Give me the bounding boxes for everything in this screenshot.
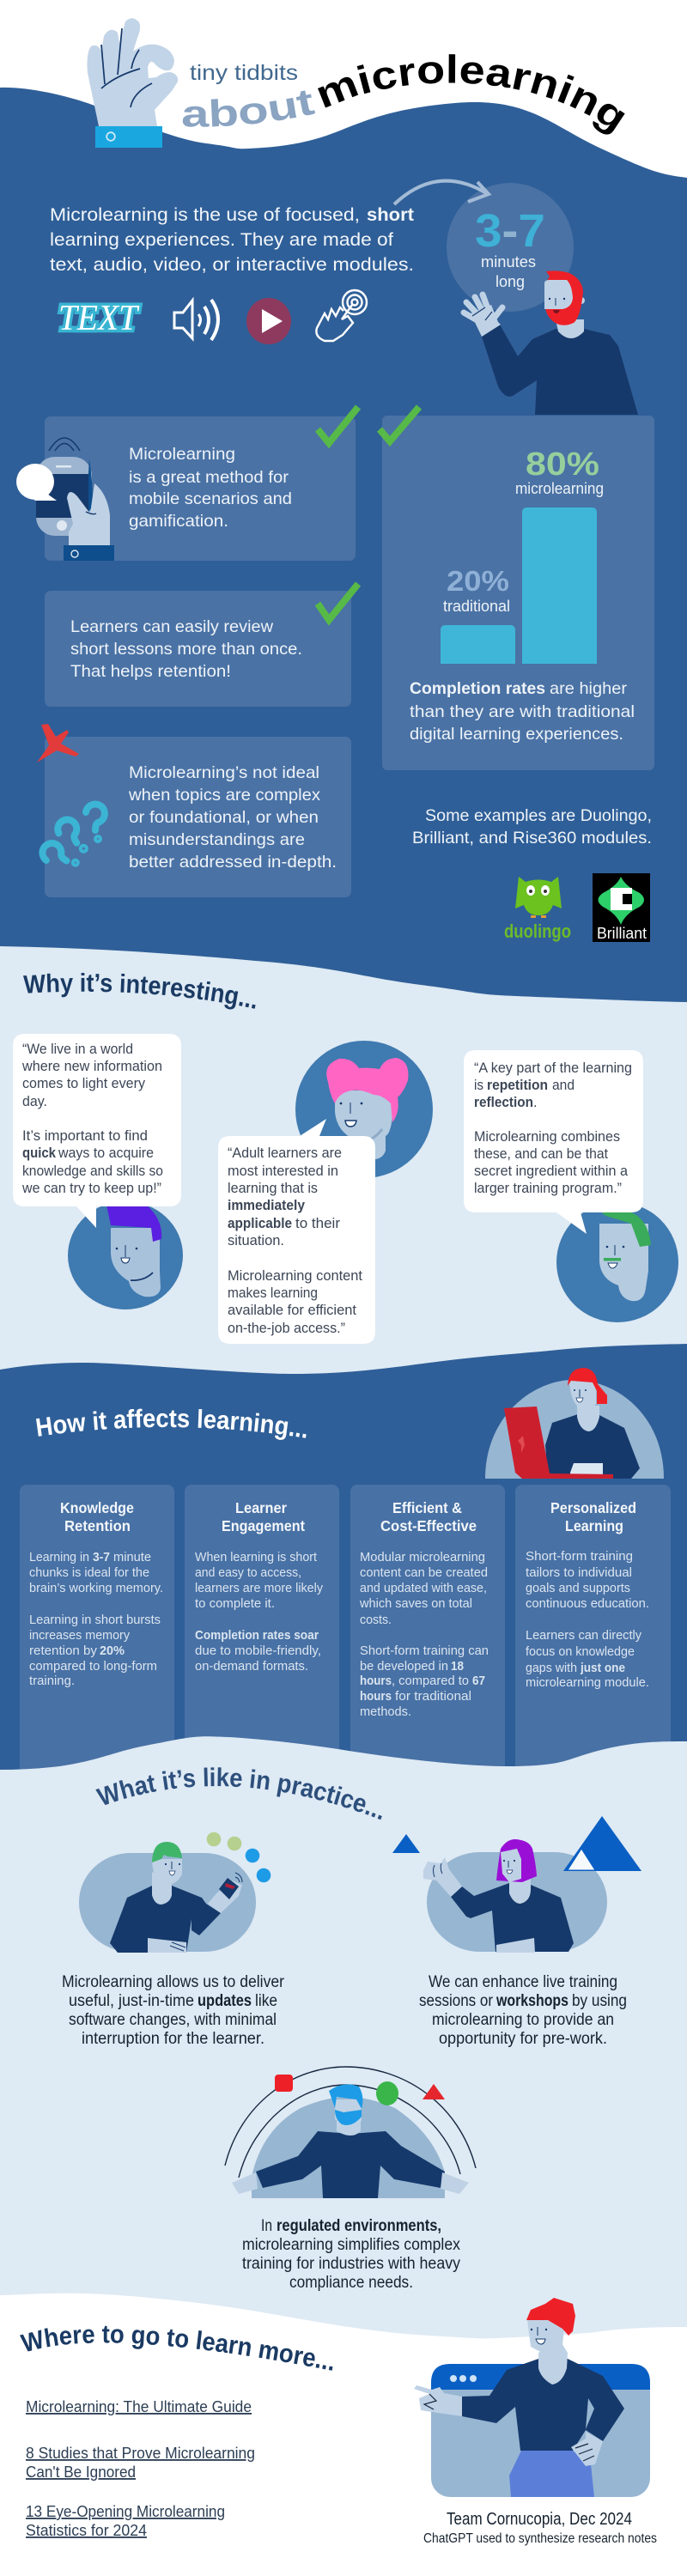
card 3: efficient and cost-effective: 67 [472,1674,485,1688]
credits: Team Cornucopia, Dec 2024 [447,2510,632,2529]
panel: benefit cards [20,1485,671,1811]
bar chart: microlearning [515,479,604,497]
section background: light why [0,946,687,2576]
icon: check marks [318,407,419,620]
speech bubble: quote 2: available for efficient [228,1303,356,1318]
intro text: text, audio, video, or interactive modules. [50,254,414,275]
text: regulated environments: microlearning simplifies complex [242,2236,460,2254]
completion text: than they are with traditional [410,702,635,721]
card 3: efficient and cost-effective: for traditional [395,1689,471,1704]
card 2: learner engagement: When learning is short [195,1550,318,1564]
link list: Statistics for 2024 [26,2521,147,2539]
examples text [412,806,652,848]
card 3: efficient and cost-effective: hours [360,1689,392,1704]
title: about [182,90,315,127]
avatar: pink hair [295,1041,433,1178]
card 4: personalized learning: just one [580,1661,625,1675]
card 1: knowledge retention: retention by [29,1643,97,1658]
panel: review card [45,591,351,707]
panel: not ideal card: misunderstandings are [129,830,305,849]
intro text: learning experiences. They are made of [50,229,393,250]
speech bubble: quote 3: larger training program.” [474,1181,622,1196]
text: updates: updates [198,1992,252,2010]
speech bubble: quote 2: “Adult learners are [228,1145,342,1161]
speech bubble: quote 2: immediately [228,1198,306,1213]
heading: what it's like in practice: What it’s like in practice... [95,1767,382,1820]
speech bubble: quote 3: secret ingredient within a [474,1163,629,1179]
card 1: knowledge retention: minute [113,1550,151,1564]
card 4: personalized learning: Short-form training [526,1549,633,1564]
card 2: learner engagement: Completion rates soar [195,1628,319,1643]
card 4: personalized learning: Learning [565,1517,623,1534]
illustration: regulated person with arcs [225,2067,476,2198]
examples text: Brilliant, and Rise360 modules. [412,829,652,848]
speech bubble: quote 1: day. [22,1094,47,1109]
text: updates: useful, just-in-time [69,1992,194,2010]
text: updates [62,1973,285,2048]
speech bubble: quote 3: repetition [487,1078,548,1093]
card 3: efficient and cost-effective: Short-form training can [360,1643,489,1658]
card 3: efficient and cost-effective: costs. [360,1613,392,1627]
card 1: knowledge retention [29,1499,163,1688]
card 1: knowledge retention: Learning in short bursts [29,1613,161,1627]
panel: right-hand completion rates [382,416,654,770]
text: updates: like [255,1992,277,2010]
text: workshops: by using [572,1992,627,2010]
speech bubble: quote 1: where new information [21,1059,162,1074]
card 3: efficient and cost-effective: Cost-Effective [380,1517,477,1534]
speech bubble: quote 1: It’s important to find [22,1128,148,1144]
speech bubble: quote 1: knowledge and skills so [22,1163,163,1179]
card 1: knowledge retention: 3-7 [93,1550,110,1564]
icon: red x [37,724,79,762]
mobile text: gamification. [129,512,228,531]
text: workshops: sessions or [419,1992,494,2010]
card 2: learner engagement [195,1499,323,1674]
section background: blue how [0,1344,687,2576]
speech bubble: quote 2: on-the-job access.” [228,1321,345,1336]
completion text: digital learning experiences. [410,725,623,744]
panel: review card: Learners can easily review [70,617,274,636]
text: regulated environments [242,2217,460,2292]
link list: Can't Be Ignored [26,2463,136,2481]
text: workshops: We can enhance live training [429,1973,617,1991]
card 4: personalized learning: gaps with [526,1661,577,1675]
arrow [394,181,489,204]
speech bubble: quote 3: “A key part of the learning [474,1060,632,1076]
title [182,54,625,135]
speech bubble: quote 3 [464,1050,643,1234]
panel: not ideal card [45,737,351,897]
speech bubble: quote 3: reflection [474,1095,533,1110]
link list [26,2397,255,2539]
heading: how it affects learning: How it affects learning... [36,1408,307,1440]
illustration: workshop person [392,1816,641,1953]
card 1: knowledge retention: brain’s working memory. [29,1581,163,1595]
mobile text: mobile scenarios and [129,489,292,508]
icon: phone in hand [16,438,114,561]
card 3: efficient and cost-effective: 18 [451,1659,464,1674]
illustration: person with laptop [485,1368,664,1479]
illustration: person with phone [79,1832,271,1953]
card 3: efficient and cost-effective: Modular microlearning [360,1550,485,1564]
icon: ok hand [88,18,178,148]
card 3: efficient and cost-effective: and updated with ease, [360,1581,487,1595]
speech bubble: quote 1: comes to light every [22,1076,146,1091]
speech bubble: quote 1 [13,1034,181,1228]
text: workshops: opportunity for pre-work. [439,2030,607,2048]
icon: video play [246,298,291,344]
bar chart: traditional [443,597,510,615]
card 1: knowledge retention: increases memory [29,1628,130,1643]
speech bubble: quote 2: most interested in [228,1163,338,1179]
card 1: knowledge retention: chunks is ideal for the [29,1565,149,1580]
speech bubble: quote 1: quick [22,1145,57,1161]
card 3: efficient and cost-effective: which saves on total [359,1596,472,1611]
speech bubble: quote 3: Microlearning combines [474,1129,620,1145]
speech bubble: quote 3: . [533,1095,538,1110]
speech bubble: quote 1: “We live in a world [22,1042,133,1057]
panel: 3-7 minutes callout: 3-7 [475,205,545,257]
intro text [50,204,414,275]
panel: not ideal card: better addressed in-depth. [129,853,337,872]
panel: 3-7 minutes callout: minutes [481,252,536,270]
icon: touch [316,290,367,341]
card 4: personalized learning: continuous education. [526,1596,649,1611]
card 2: learner engagement: and easy to access, [195,1565,301,1580]
icon: question marks [40,804,105,874]
text: workshops: microlearning to provide an [432,2011,614,2029]
card 1: knowledge retention: Retention [64,1517,131,1534]
logo: duolingo [504,877,571,942]
text: regulated environments: training for industries with heavy [242,2255,460,2273]
speech bubble: quote 2: Microlearning content [228,1268,362,1284]
panel: 3-7 minutes callout [447,183,574,312]
card 4: personalized learning: goals and supports [526,1581,630,1595]
section background: white footer [0,2293,687,2576]
avatar: purple hair [68,1201,183,1309]
card 2: learner engagement: to complete it. [195,1596,275,1611]
speech bubble: quote 2: makes learning [228,1285,318,1301]
illustration: presenter with browser window [414,2298,650,2497]
title: tiny tidbits [190,61,298,85]
speech bubble: quote 3: these, and can be that [474,1146,608,1162]
mobile text: Microlearning [129,445,235,464]
card 2: learner engagement: Learner [235,1499,287,1516]
card 4: personalized learning: microlearning module. [526,1675,649,1690]
completion text [410,679,635,744]
avatar: green hair [556,1202,678,1322]
mobile text: is a great method for [129,468,289,487]
intro text: short [367,204,414,225]
intro text: Microlearning is the use of focused, [50,204,360,225]
card 3: efficient and cost-effective: content can be created [360,1565,488,1580]
card 3: efficient and cost-effective: Efficient & [392,1499,462,1516]
text: regulated environments: regulated environments, [277,2217,441,2235]
text: updates: interruption for the learner. [82,2030,264,2048]
text: updates: software changes, with minimal [69,2011,277,2029]
text: regulated environments: In [261,2217,272,2235]
card 2: learner engagement: due to mobile-friendly, [195,1643,321,1658]
card 1: knowledge retention: training. [29,1674,75,1688]
speech bubble: quote 3: is [474,1078,483,1093]
card 4: personalized learning: focus on knowledge [526,1644,635,1659]
heading: where to go: Where to go to learn more... [20,2325,333,2371]
speech bubble: quote 2 [218,1119,375,1344]
bar chart [441,447,604,664]
card 1: knowledge retention: compared to long-form [29,1659,157,1674]
bar chart: 80% [526,447,599,483]
icon: audio [174,300,218,340]
text: workshops: workshops [495,1992,568,2010]
logo: duolingo: duolingo [504,920,571,942]
logo: brilliant [593,873,650,942]
card 1: knowledge retention: Knowledge [60,1499,134,1516]
card 3: efficient and cost-effective: , compared to [392,1674,469,1688]
panel: 3-7 minutes callout: long [495,272,525,290]
link list: 8 Studies that Prove Microlearning [26,2444,255,2462]
card 2: learner engagement: learners are more likely [195,1581,323,1595]
speech bubble: quote 1: ways to acquire [58,1145,154,1161]
card 3: efficient and cost-effective: hours [360,1674,392,1688]
panel: not ideal card: Microlearning’s not ideal [129,763,319,782]
person: waving man [464,270,638,415]
panel: not ideal card: or foundational, or when [129,808,319,827]
speech bubble: quote 2: applicable [228,1216,292,1231]
card 2: learner engagement: Engagement [222,1517,305,1534]
logo: brilliant: Brilliant [597,925,647,942]
card 3: efficient and cost-effective [359,1499,489,1719]
completion text: Completion rates [410,679,545,698]
card 3: efficient and cost-effective: methods. [360,1704,411,1719]
panel: not ideal card: when topics are complex [128,786,320,805]
link list: Microlearning: The Ultimate Guide [26,2397,252,2415]
card 3: efficient and cost-effective: be developed in [360,1659,448,1674]
card 1: knowledge retention: 20% [100,1643,125,1658]
section background: light practice [0,1736,687,2576]
card 1: knowledge retention: Learning in [29,1550,89,1564]
completion text: are higher [550,679,628,698]
credits: ChatGPT used to synthesize research notes [423,2531,657,2546]
speech bubble: quote 3: and [552,1078,575,1093]
mobile text [129,445,292,531]
card 2: learner engagement: on-demand formats. [195,1659,308,1674]
card 4: personalized learning: tailors to individual [526,1565,632,1580]
credits [423,2510,657,2546]
text: regulated environments: compliance needs. [289,2274,413,2292]
panel: review card: That helps retention! [70,662,231,681]
bar chart: 20% [447,565,509,597]
text: workshops [419,1973,627,2048]
speech bubble: quote 2: situation. [228,1233,284,1249]
panel: mobile card [16,416,356,561]
title: microlearning [318,54,625,135]
card 4: personalized learning: Personalized [550,1499,636,1516]
speech bubble: quote 1: we can try to keep up!” [21,1181,161,1196]
card 4: personalized learning [526,1499,649,1690]
panel: review card: short lessons more than once. [70,640,302,659]
speech bubble: quote 2: to their [295,1216,341,1231]
heading: why interesting: Why it’s interesting... [23,973,256,1010]
examples text: Some examples are Duolingo, [425,806,652,825]
link list: 13 Eye-Opening Microlearning [26,2502,225,2520]
text: updates: Microlearning allows us to deliver [62,1973,285,1991]
icon: text: TEXT [58,299,139,338]
card 4: personalized learning: Learners can directly [526,1628,641,1643]
speech bubble: quote 2: learning that is [228,1181,318,1196]
